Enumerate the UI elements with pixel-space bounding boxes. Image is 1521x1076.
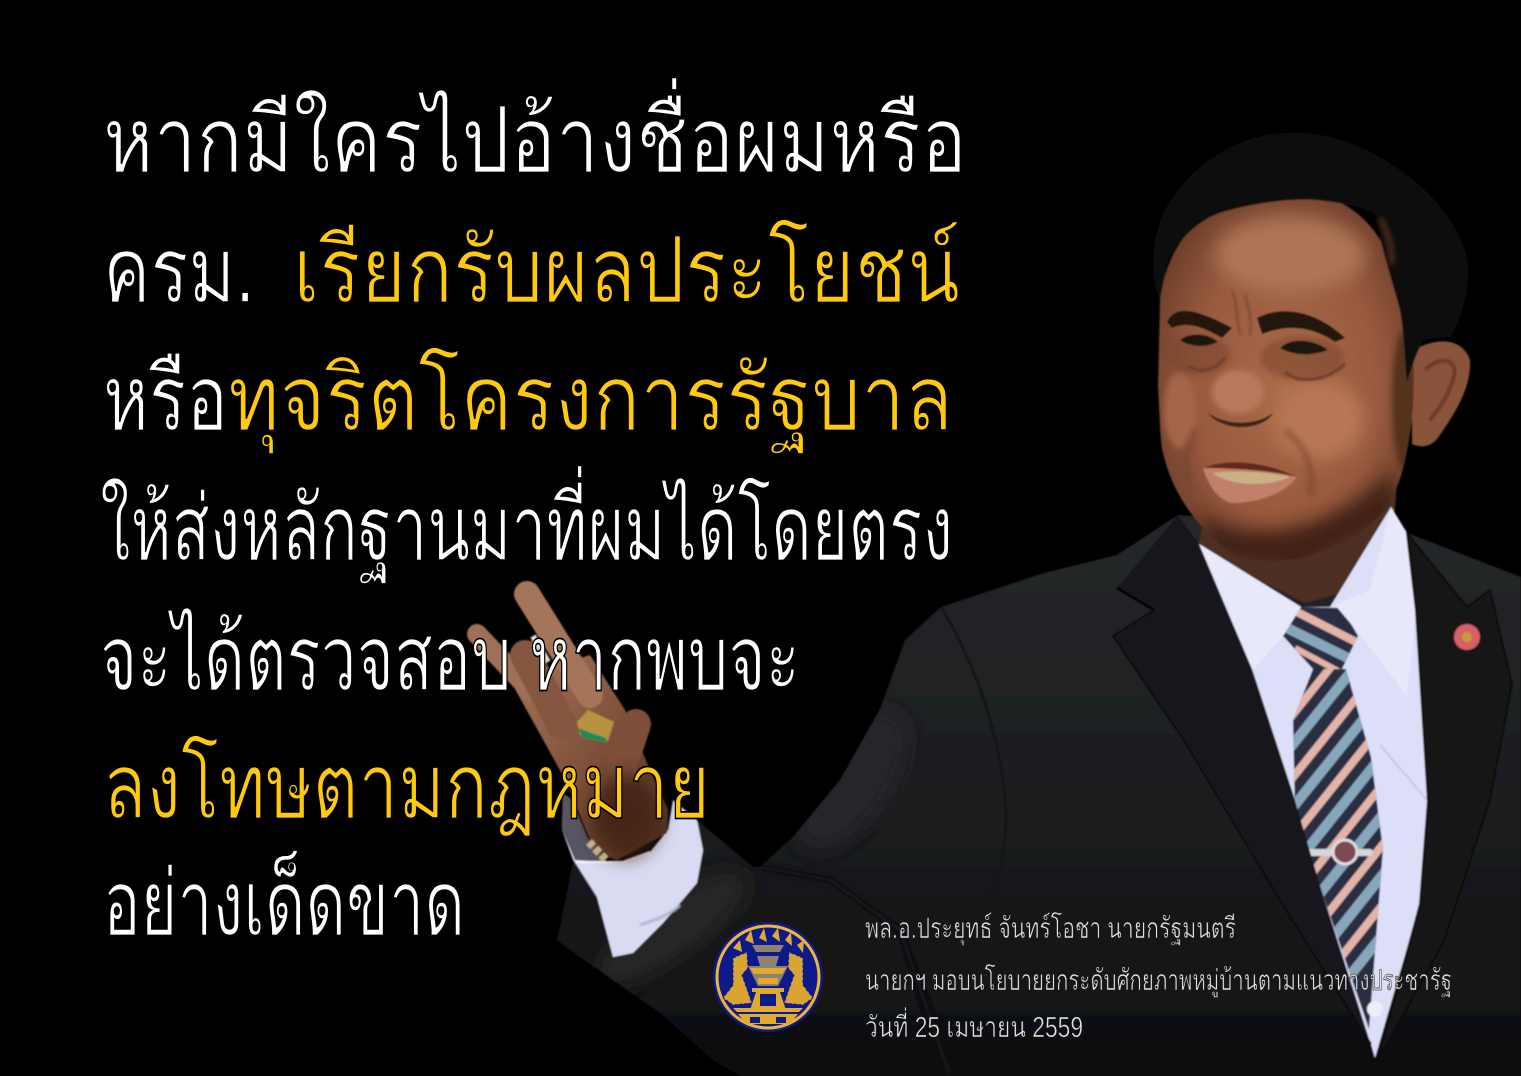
vase stack (748, 945, 788, 986)
second finger (477, 634, 530, 690)
left lion (723, 952, 752, 1005)
cheek highlight (1275, 380, 1365, 460)
right lapel (1378, 533, 1512, 1060)
palm and wrist (510, 655, 668, 860)
headline line 2 (103, 219, 960, 322)
shirt collar left (1199, 544, 1301, 671)
mouth (1203, 462, 1297, 503)
left lapel (1113, 515, 1375, 1058)
headline line 2: เรียกรับผลประโยชน์ (293, 219, 960, 322)
shirt collar right (1335, 507, 1416, 696)
flames (733, 928, 804, 953)
headline line 4: ให้ส่งหลักฐานมาที่ผมได้โดยตรง (100, 465, 953, 585)
ear (1412, 341, 1470, 446)
finger ring light (533, 636, 548, 662)
headline line 1: หากมีใครไปอ้างชื่อผมหรือ (103, 77, 967, 192)
sleeve seam (940, 607, 1006, 790)
nose (1207, 370, 1273, 427)
collar fold line on shirt (1380, 745, 1428, 801)
chin shadow (1197, 470, 1400, 575)
bead bracelet (589, 842, 606, 860)
sleeve folds (760, 867, 950, 1076)
source caption (865, 911, 1452, 1044)
headline line 3: ทุจริตโครงการรัฐบาล (228, 347, 953, 455)
shirt front (1199, 507, 1428, 1058)
headline line 6: ลงโทษตามกฎหมาย (103, 735, 710, 838)
eyes (1180, 335, 1218, 346)
index finger (527, 594, 590, 695)
pedestal (750, 988, 786, 1010)
eye bags (1188, 358, 1345, 380)
source caption: วันที่ 25 เมษายน 2559 (865, 1007, 1083, 1044)
curled finger (614, 724, 636, 790)
hand (477, 594, 668, 860)
third finger (525, 655, 562, 725)
right lion (784, 952, 813, 1005)
headline line 7: อย่างเด็ดขาด (103, 849, 465, 955)
photo: man in suit (477, 133, 1521, 1076)
hair (1153, 133, 1468, 382)
source caption: พล.อ.ประยุทธ์ จันทร์โอชา นายกรัฐมนตรี (865, 911, 1236, 946)
eyebrows (1167, 311, 1232, 338)
shirt cuff (562, 793, 703, 957)
eye sockets (1176, 334, 1230, 375)
government emblem (713, 922, 823, 1032)
necktie (1282, 606, 1384, 1029)
headline line 3: หรือ (103, 348, 228, 450)
tie clip (1307, 840, 1373, 864)
temple shadow (1392, 330, 1416, 470)
headline line 5: จะได้ตรวจสอบ หากพบจะ (100, 608, 800, 710)
gold ring (577, 710, 614, 741)
neck (1199, 440, 1400, 603)
forehead highlight (1215, 217, 1365, 293)
headline line 2: ครม. (103, 220, 255, 322)
face (1158, 190, 1416, 575)
suit jacket (557, 515, 1521, 1076)
frown lines (1232, 290, 1251, 335)
nasolabial shadow (1186, 430, 1311, 495)
shirt button (1367, 1001, 1383, 1017)
base band (733, 1008, 803, 1024)
wrist shadow (591, 773, 659, 857)
lapel pin (1454, 624, 1480, 650)
